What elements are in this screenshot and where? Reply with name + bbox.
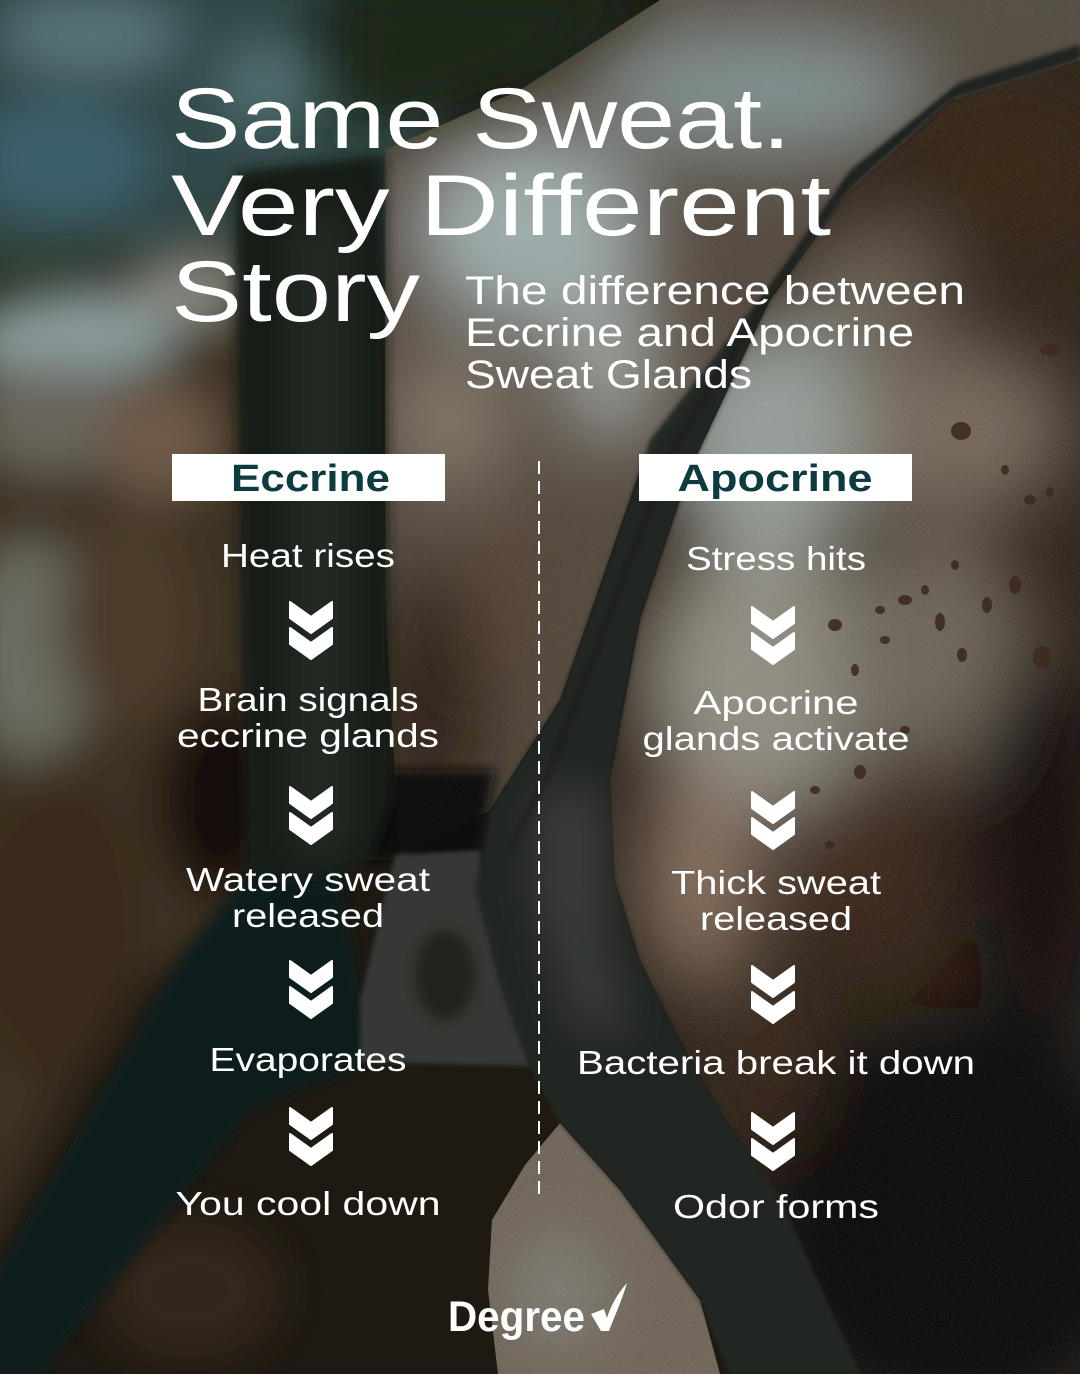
heading: Apocrine bbox=[639, 454, 912, 501]
arrow 2 bbox=[752, 792, 794, 849]
heading: Apocrine: Apocrine bbox=[678, 458, 872, 500]
dark lower left strap bbox=[0, 800, 370, 1374]
arrow 4 bbox=[752, 1113, 794, 1170]
dark fabric fold bbox=[360, 850, 530, 1066]
center shoulder skin bbox=[385, 0, 1080, 814]
logo: Degree: Degree bbox=[448, 1293, 585, 1341]
strap weave highlight bbox=[540, 790, 630, 1030]
step: Bacteria break it down: Bacteria break it down bbox=[577, 1044, 975, 1081]
step: Thick sweat released: Thick sweat bbox=[671, 864, 881, 901]
arrow 1 bbox=[290, 602, 332, 659]
diagonal strap on right shoulder bbox=[475, 44, 1080, 1374]
step: Evaporates: Evaporates bbox=[210, 1041, 406, 1078]
step: Thick sweat released: released bbox=[700, 900, 852, 937]
heading: Eccrine bbox=[172, 454, 445, 501]
vertical strap on left shoulder bbox=[235, 155, 392, 880]
left shoulder bbox=[0, 225, 290, 1300]
lower left body bbox=[60, 1062, 560, 1374]
panel: eccrine column bbox=[172, 454, 445, 1222]
step: Thick sweat released bbox=[671, 864, 881, 937]
step: Watery sweat released bbox=[186, 861, 430, 934]
top neck dark area bbox=[345, 0, 650, 130]
step: Brain signals eccrine glands: eccrine glands bbox=[177, 717, 439, 754]
arrow 4 bbox=[290, 1108, 332, 1165]
step: Odor forms: Odor forms bbox=[673, 1188, 879, 1225]
step: Watery sweat released: released bbox=[232, 897, 384, 934]
step: Brain signals eccrine glands: Brain signals bbox=[198, 681, 418, 718]
title: Same Sweat. bbox=[171, 71, 791, 167]
arrow 3 bbox=[290, 961, 332, 1018]
arrow 2 bbox=[290, 787, 332, 844]
logo: Degree bbox=[448, 1283, 627, 1341]
title: Very Different bbox=[171, 158, 831, 254]
step: Brain signals eccrine glands bbox=[177, 681, 439, 754]
foliage backdrop top left bbox=[0, 0, 640, 288]
skin grain bbox=[610, 60, 1080, 1374]
step: Heat rises: Heat rises bbox=[221, 537, 395, 574]
heading: Eccrine: Eccrine bbox=[231, 458, 390, 500]
subtitle: Sweat Glands bbox=[465, 353, 752, 397]
step: Stress hits: Stress hits bbox=[686, 540, 866, 577]
step: You cool down: You cool down bbox=[176, 1185, 440, 1222]
step: Apocrine glands activate bbox=[642, 684, 910, 757]
dark fold behind strap bbox=[360, 770, 495, 860]
subtitle: The difference between bbox=[465, 269, 965, 313]
subtitle bbox=[465, 269, 965, 397]
panel: apocrine column bbox=[577, 454, 975, 1225]
title: Story bbox=[171, 244, 420, 340]
lower center skin bbox=[488, 1123, 720, 1374]
dashed divider bbox=[538, 461, 540, 1200]
step: Apocrine glands activate: Apocrine bbox=[694, 684, 858, 721]
step: Watery sweat released: Watery sweat bbox=[186, 861, 430, 898]
arrow 3 bbox=[752, 966, 794, 1023]
sweat droplets bbox=[810, 344, 1060, 849]
strap centre dark stitch bbox=[510, 52, 1080, 850]
right shoulder skin bbox=[610, 60, 1080, 1374]
subtitle: Eccrine and Apocrine bbox=[465, 311, 914, 355]
title bbox=[171, 71, 831, 340]
step: Apocrine glands activate: glands activate bbox=[642, 720, 910, 757]
arrow 1 bbox=[752, 607, 794, 664]
